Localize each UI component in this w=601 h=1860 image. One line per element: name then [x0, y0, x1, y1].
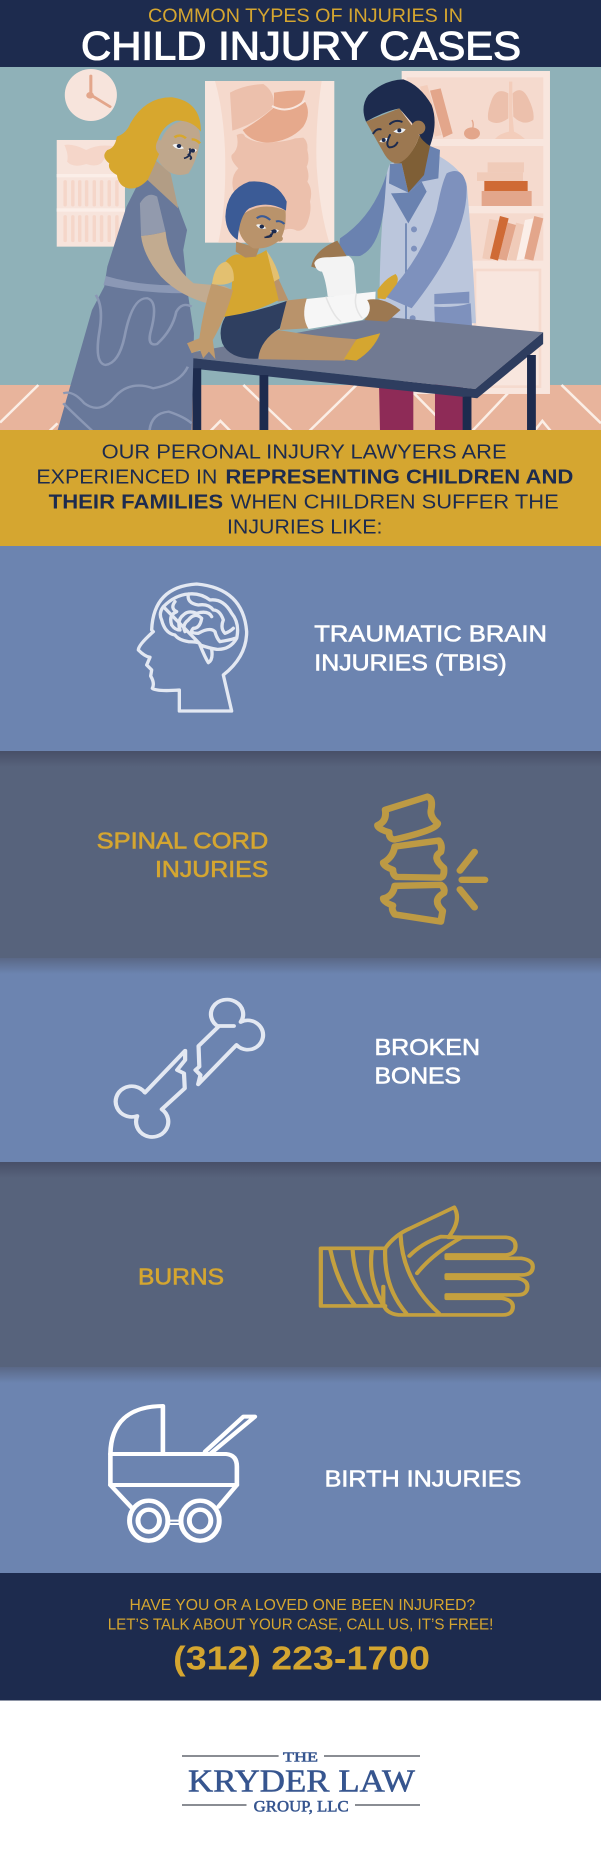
gold intro banner [0, 430, 601, 546]
sleeve [140, 195, 166, 236]
neck [393, 136, 430, 193]
mother [57, 97, 232, 431]
skirt squiggles [63, 295, 192, 431]
lungs model [488, 82, 534, 139]
call to action text: HAVE YOU OR A LOVED ONE BEEN INJURED? [130, 1597, 476, 1614]
belt [103, 276, 188, 293]
left arm [187, 283, 233, 359]
main title: CHILD INJURY CASES [81, 24, 521, 68]
icon: head with brain [138, 584, 247, 711]
icon: fractured spine [378, 797, 485, 922]
logo: The Kryder Law Group: THE [283, 1751, 318, 1766]
shorts [221, 301, 287, 359]
leaning books [420, 85, 442, 137]
hair [104, 97, 201, 189]
shoe [344, 333, 380, 361]
logo: The Kryder Law Group [0, 1700, 601, 1860]
label: INJURIES [155, 856, 268, 882]
intro text: REPRESENTING CHILDREN AND [225, 467, 573, 489]
label: BURNS [138, 1263, 224, 1289]
doctor's arm left [338, 173, 387, 256]
anatomy poster [205, 81, 334, 243]
bandaged leg [304, 292, 376, 329]
face [155, 121, 200, 175]
background wall, floor, clock and chart [0, 67, 601, 431]
bandaged foot [378, 274, 398, 299]
panel: spinal cord injuries [0, 751, 601, 958]
doctor's arm right [385, 171, 467, 308]
shirt [222, 250, 279, 317]
header subtitle: COMMON TYPES OF INJURIES IN [148, 5, 463, 27]
right arm [268, 253, 288, 302]
label [97, 828, 268, 882]
foreground: gauze, table, mother, child [57, 97, 543, 431]
doctor's lower hand [364, 299, 401, 322]
shelf books [482, 216, 543, 261]
lower leg [259, 330, 356, 361]
neck [148, 160, 178, 208]
label: TRAUMATIC BRAIN [314, 620, 547, 646]
trousers [379, 383, 463, 432]
intro text: OUR PERONAL INJURY LAWYERS ARE [102, 442, 507, 464]
logo: The Kryder Law Group: GROUP, LLC [254, 1799, 349, 1816]
label: SPINAL CORD [97, 828, 268, 854]
examination table [173, 317, 543, 431]
intro text: EXPERIENCED IN [36, 467, 217, 489]
wall [0, 67, 601, 387]
lab coat [379, 146, 476, 323]
coat pocket [434, 292, 472, 327]
gauze roll [314, 256, 356, 297]
label: BIRTH INJURIES [325, 1466, 521, 1492]
call to action text [108, 1597, 493, 1633]
thigh under bandage [280, 298, 309, 330]
label: INJURIES (TBIS) [314, 650, 507, 676]
shirt sleeve [212, 262, 234, 285]
stacked books [477, 162, 532, 206]
arm [141, 232, 232, 305]
face [238, 206, 286, 249]
label: BONES [374, 1063, 461, 1089]
doctor hands [311, 241, 347, 270]
header banner [0, 0, 601, 68]
label [374, 1034, 480, 1089]
label [314, 620, 547, 676]
hair [225, 181, 287, 240]
apple [464, 120, 480, 139]
wall chart left [57, 140, 125, 247]
logo: The Kryder Law Group: KRYDER LAW [188, 1763, 416, 1799]
intro text: WHEN CHILDREN SUFFER THE [231, 492, 559, 514]
doctor head [363, 79, 435, 163]
call to action band [0, 1573, 601, 1700]
icon: baby stroller [110, 1406, 255, 1541]
shirt and collar [389, 146, 440, 223]
intro text: THEIR FAMILIES [49, 492, 223, 514]
placket and buttons [403, 223, 408, 320]
panel: burns [0, 1162, 601, 1367]
panel: broken bones [0, 958, 601, 1162]
intro text: INJURIES LIKE: [227, 517, 382, 539]
label: BROKEN [374, 1034, 480, 1060]
floor [0, 385, 601, 431]
phone number: (312) 223-1700 [173, 1639, 430, 1676]
wall clock [65, 69, 117, 121]
icon: broken bone [116, 1000, 263, 1137]
illustration: doctor bandaging child's leg with mother in clinic [0, 67, 601, 432]
icon: bandaged hand [321, 1207, 533, 1315]
dress [57, 180, 194, 431]
doctor [338, 79, 476, 432]
child [187, 181, 401, 361]
panel: traumatic brain injuries [0, 546, 601, 751]
panel: birth injuries [0, 1367, 601, 1573]
intro text [36, 442, 573, 539]
call to action text: LET’S TALK ABOUT YOUR CASE, CALL US, IT’S FREE! [108, 1616, 493, 1633]
bookcase [402, 71, 550, 394]
neck [236, 242, 259, 258]
